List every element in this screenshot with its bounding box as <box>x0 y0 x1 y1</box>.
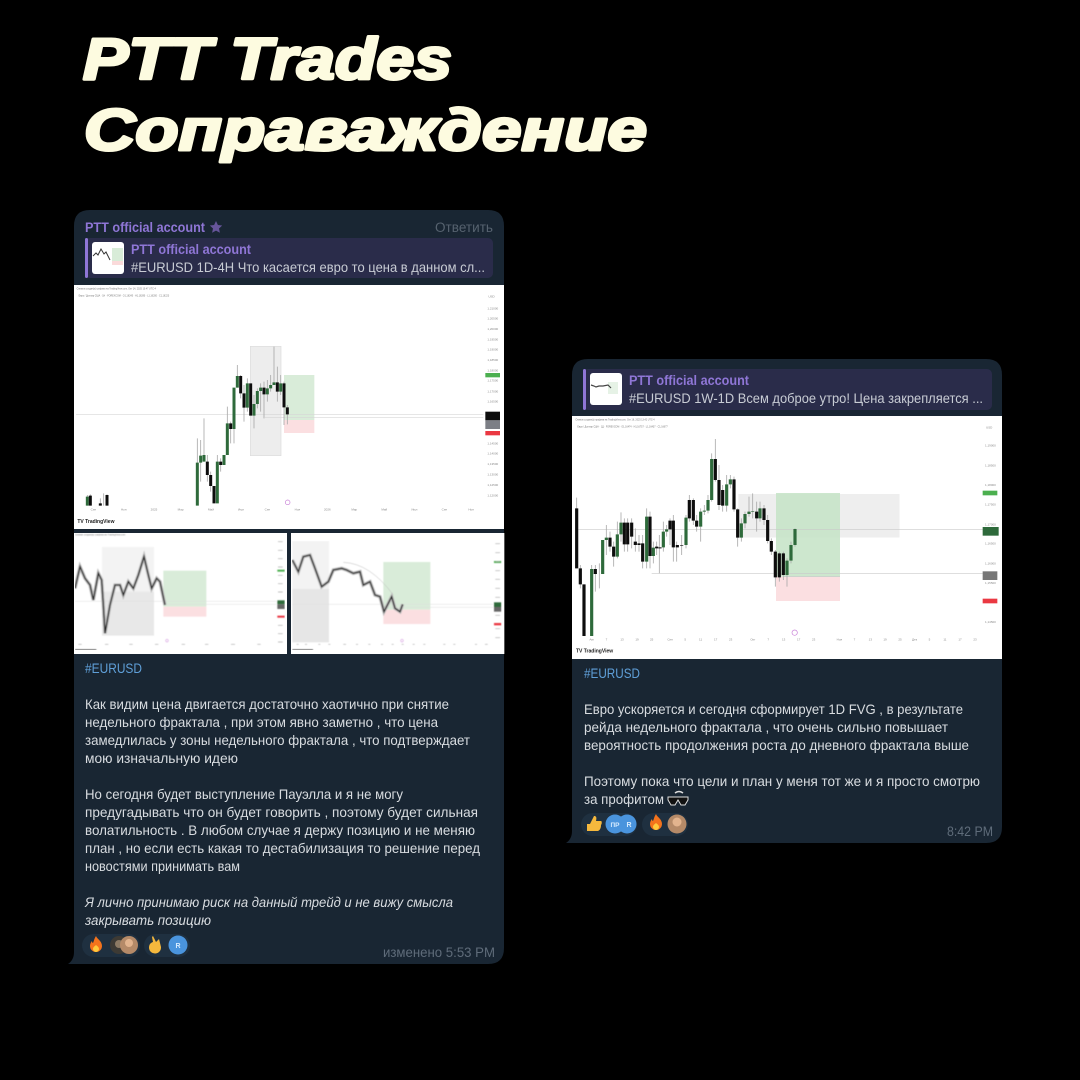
chart: main EURUSD 1D-4H: Май <box>208 507 214 511</box>
chart: main EURUSD 1D-4H: Ноя <box>295 507 301 511</box>
message text: left card: мою изначальную идею <box>85 750 238 766</box>
chart: EURUSD 1W-1D: 25 <box>650 638 654 642</box>
timestamp: left card: изменено 5:53 PM <box>383 945 495 960</box>
chart: main EURUSD 1D-4H: Июл <box>238 507 244 511</box>
icon: star <box>210 221 222 233</box>
chart: main EURUSD 1D-4H: 1,17500 <box>487 379 499 383</box>
chart: main EURUSD 1D-4H: 1,18500 <box>487 358 499 362</box>
chart: main EURUSD 1D-4H: 1,13000 <box>487 472 499 476</box>
sender name: PTT official account <box>85 220 205 235</box>
chart: EURUSD 1W-1D: 5 <box>929 638 931 642</box>
chart: main EURUSD 1D-4H: Июл <box>411 507 418 511</box>
chart: main EURUSD 1D-4H: 1,20500 <box>487 317 499 321</box>
chart: EURUSD 1W-1D: 13 <box>869 638 872 642</box>
quoted reply <box>85 238 493 278</box>
chart: main EURUSD 1D-4H: 1,19000 <box>487 348 499 352</box>
chart: EURUSD 1W-1D: 1,16000 <box>985 561 996 565</box>
chart: main EURUSD 1D-4H: 1,20000 <box>487 327 499 331</box>
chart: main EURUSD 1D-4H: 1,18000 <box>487 368 499 372</box>
message text: left card: предугадывать что он будет говорить , поэтому будет сильная <box>85 804 478 820</box>
chart: EURUSD 1W-1D: 7 <box>606 638 608 642</box>
chart: main EURUSD 1D-4H: Евро / Доллар США · 1Н · FOREXCOM · О1,16245 · Н1,16280 · L1,16200 · С1,16223 <box>79 295 170 298</box>
card background <box>566 359 1002 843</box>
chart: main EURUSD 1D-4H: 1,17000 <box>487 389 499 393</box>
chart: main EURUSD 1D-4H: 1,14500 <box>487 441 499 445</box>
chart: small left: Снимок создан(а) графика на TradingView.com <box>75 534 125 537</box>
chart: main EURUSD 1D-4H: Ноя <box>121 507 127 511</box>
chart: EURUSD 1W-1D: 7 <box>767 638 769 642</box>
chart: main EURUSD 1D-4H: Снимок создан(а) графика на TradingView.com, Окт 14, 2025 10:47 UTC-4 <box>77 288 157 291</box>
chart: EURUSD 1W-1D: Дек <box>912 638 918 642</box>
title: Соправаждение <box>84 98 647 163</box>
chart: EURUSD 1W-1D: 13 <box>620 638 624 642</box>
chart: EURUSD 1W-1D: 11 <box>699 638 702 642</box>
panel: right message card <box>566 359 1002 843</box>
quoted reply: PTT official account <box>629 373 749 388</box>
chart: main EURUSD 1D-4H: 1,12500 <box>487 483 499 487</box>
reactions: right card <box>581 813 688 836</box>
chart: EURUSD 1W-1D: 1,18000 <box>985 483 996 487</box>
quoted reply: #EURUSD 1D-4H Что касается евро то цена в данном сл... <box>131 259 485 275</box>
chart: EURUSD 1W-1D: 1,15500 <box>985 581 996 585</box>
chart: main EURUSD 1D-4H: Мар <box>178 507 184 511</box>
chart: main EURUSD 1D-4H: USD <box>488 295 496 299</box>
chart: main EURUSD 1D-4H: 1,19500 <box>487 337 499 341</box>
chart: EURUSD 1W-1D: 17 <box>958 638 962 642</box>
icon: sunglasses emoji <box>668 792 688 805</box>
message text: left card: закрывать позицию <box>84 912 211 928</box>
chart: EURUSD 1W-1D: USD <box>986 426 993 430</box>
chart: main EURUSD 1D-4H: TV TradingView <box>77 519 115 525</box>
message text: left card: недельного фрактала , при этом явно заметно , что цена <box>85 714 438 730</box>
message text: left card <box>84 660 480 928</box>
chart: main EURUSD 1D-4H: Сен <box>265 507 271 511</box>
quoted reply: #EURUSD 1W-1D Всем доброе утро! Цена закрепляется ... <box>629 390 983 406</box>
chart: EURUSD 1W-1D: Сен <box>667 638 673 642</box>
message text: right card: рейда недельного фрактала , что очень сильно повышает <box>584 719 949 735</box>
chart: main EURUSD 1D-4H: 2025 <box>151 507 158 511</box>
chart: EURUSD 1W-1D: Ноя <box>837 638 843 642</box>
chart: EURUSD 1W-1D: 23 <box>812 638 816 642</box>
chart: EURUSD 1W-1D: 17 <box>797 638 801 642</box>
chart: main EURUSD 1D-4H: 1,12000 <box>487 493 499 497</box>
chart: EURUSD 1W-1D: 1,16500 <box>985 542 996 546</box>
chart: EURUSD 1W-1D: 5 <box>684 638 686 642</box>
reactions: left card: R <box>175 943 181 950</box>
chart: main EURUSD 1D-4H: Май <box>381 507 388 511</box>
chart: EURUSD 1W-1D: 13 <box>782 638 786 642</box>
chart: EURUSD 1W-1D: 1,18500 <box>985 463 996 467</box>
chart: EURUSD 1W-1D: 17 <box>714 638 718 642</box>
chart: EURUSD 1W-1D: 19 <box>883 638 887 642</box>
title: PTT Trades <box>83 27 452 92</box>
message text: right card: вероятность продолжения роста до дневного фрактала выше <box>584 737 969 753</box>
message text: left card: замедлилась у зоны недельного фрактала , что подтверждает <box>85 732 471 748</box>
message text: right card: Евро ускоряется и сегодня сформирует 1D FVG , в результате <box>584 701 963 717</box>
chart: EURUSD 1W-1D: 7 <box>854 638 856 642</box>
message text: right card: #EURUSD <box>584 665 640 681</box>
chart: main EURUSD 1D-4H: Мар <box>351 507 358 511</box>
chart: main EURUSD 1D-4H: 1,14000 <box>487 452 499 456</box>
chart: EURUSD 1W-1D: 1,14500 <box>985 620 996 624</box>
chart: EURUSD 1W-1D: Евро / Доллар США · 1Д · FOREXCOM · О1,16474 · Н1,16757 · L1,16437 · С1,16677 <box>577 426 668 429</box>
message text: left card: план , но если есть какая то дестабилизация то решение перед <box>85 840 480 856</box>
chart: main EURUSD 1D-4H: Ноя <box>468 507 474 511</box>
chart: EURUSD 1W-1D: 1,17000 <box>985 522 996 526</box>
reactions: right card: R <box>626 822 632 829</box>
chart: main EURUSD 1D-4H: 2026 <box>324 507 331 511</box>
message text: right card <box>584 665 980 807</box>
chart: EURUSD 1W-1D: Окт <box>750 638 756 642</box>
message text: left card: #EURUSD <box>85 660 142 676</box>
panel: left message card <box>68 210 504 964</box>
message text: left card: волатильность . В любом случае я держу позицию и не меняю <box>85 822 475 838</box>
chart: EURUSD 1W-1D: 23 <box>973 638 977 642</box>
reply link: Ответить <box>435 220 493 235</box>
chart: EURUSD 1W-1D: 1,19000 <box>985 444 996 448</box>
chart: main EURUSD 1D-4H: 1,16500 <box>487 400 499 404</box>
chart: EURUSD 1W-1D <box>572 416 1002 659</box>
chart: EURUSD 1W-1D: 11 <box>943 638 947 642</box>
chart: main EURUSD 1D-4H: 1,13500 <box>487 462 499 466</box>
chart: EURUSD 1W-1D: 1,17500 <box>985 503 996 507</box>
chart: EURUSD 1W-1D: TV TradingView <box>576 649 613 655</box>
chart: EURUSD 1W-1D: Авг <box>589 638 594 642</box>
chart: EURUSD 1W-1D: 19 <box>635 638 639 642</box>
quoted reply <box>583 369 992 410</box>
timestamp: right card: 8:42 PM <box>947 824 993 839</box>
message text: left card: Как видим цена двигается достаточно хаотично при снятие <box>85 696 449 712</box>
reactions: left card <box>82 934 190 957</box>
chart: main EURUSD 1D-4H: Сен <box>91 507 97 511</box>
message text: left card: Я лично принимаю риск на данный трейд и не вижу смысла <box>84 894 453 910</box>
chart: EURUSD 1W-1D: 25 <box>898 638 902 642</box>
chart: small right <box>291 533 504 654</box>
message text: left card: Но сегодня будет выступление Пауэлла и я не могу <box>85 786 403 802</box>
quoted reply: PTT official account <box>131 242 251 257</box>
message text: right card: Поэтому пока что цели и план у меня тот же и я просто смотрю <box>584 773 980 789</box>
message text: right card: за профитом <box>584 791 664 807</box>
chart: main EURUSD 1D-4H <box>74 285 504 529</box>
chart: small left <box>74 533 287 654</box>
reactions: right card: ПР <box>610 822 620 829</box>
title <box>83 27 647 163</box>
chart: main EURUSD 1D-4H: Сен <box>442 507 448 511</box>
chart: EURUSD 1W-1D: 23 <box>729 638 733 642</box>
message text: left card: новостями принимать вам <box>85 858 240 874</box>
card background <box>68 210 504 964</box>
chart: EURUSD 1W-1D: Снимок создан(а) графика на TradingView.com, Окт 16, 2025 13:42 UTC-4 <box>575 419 655 422</box>
chart: main EURUSD 1D-4H: 1,21000 <box>487 306 499 310</box>
